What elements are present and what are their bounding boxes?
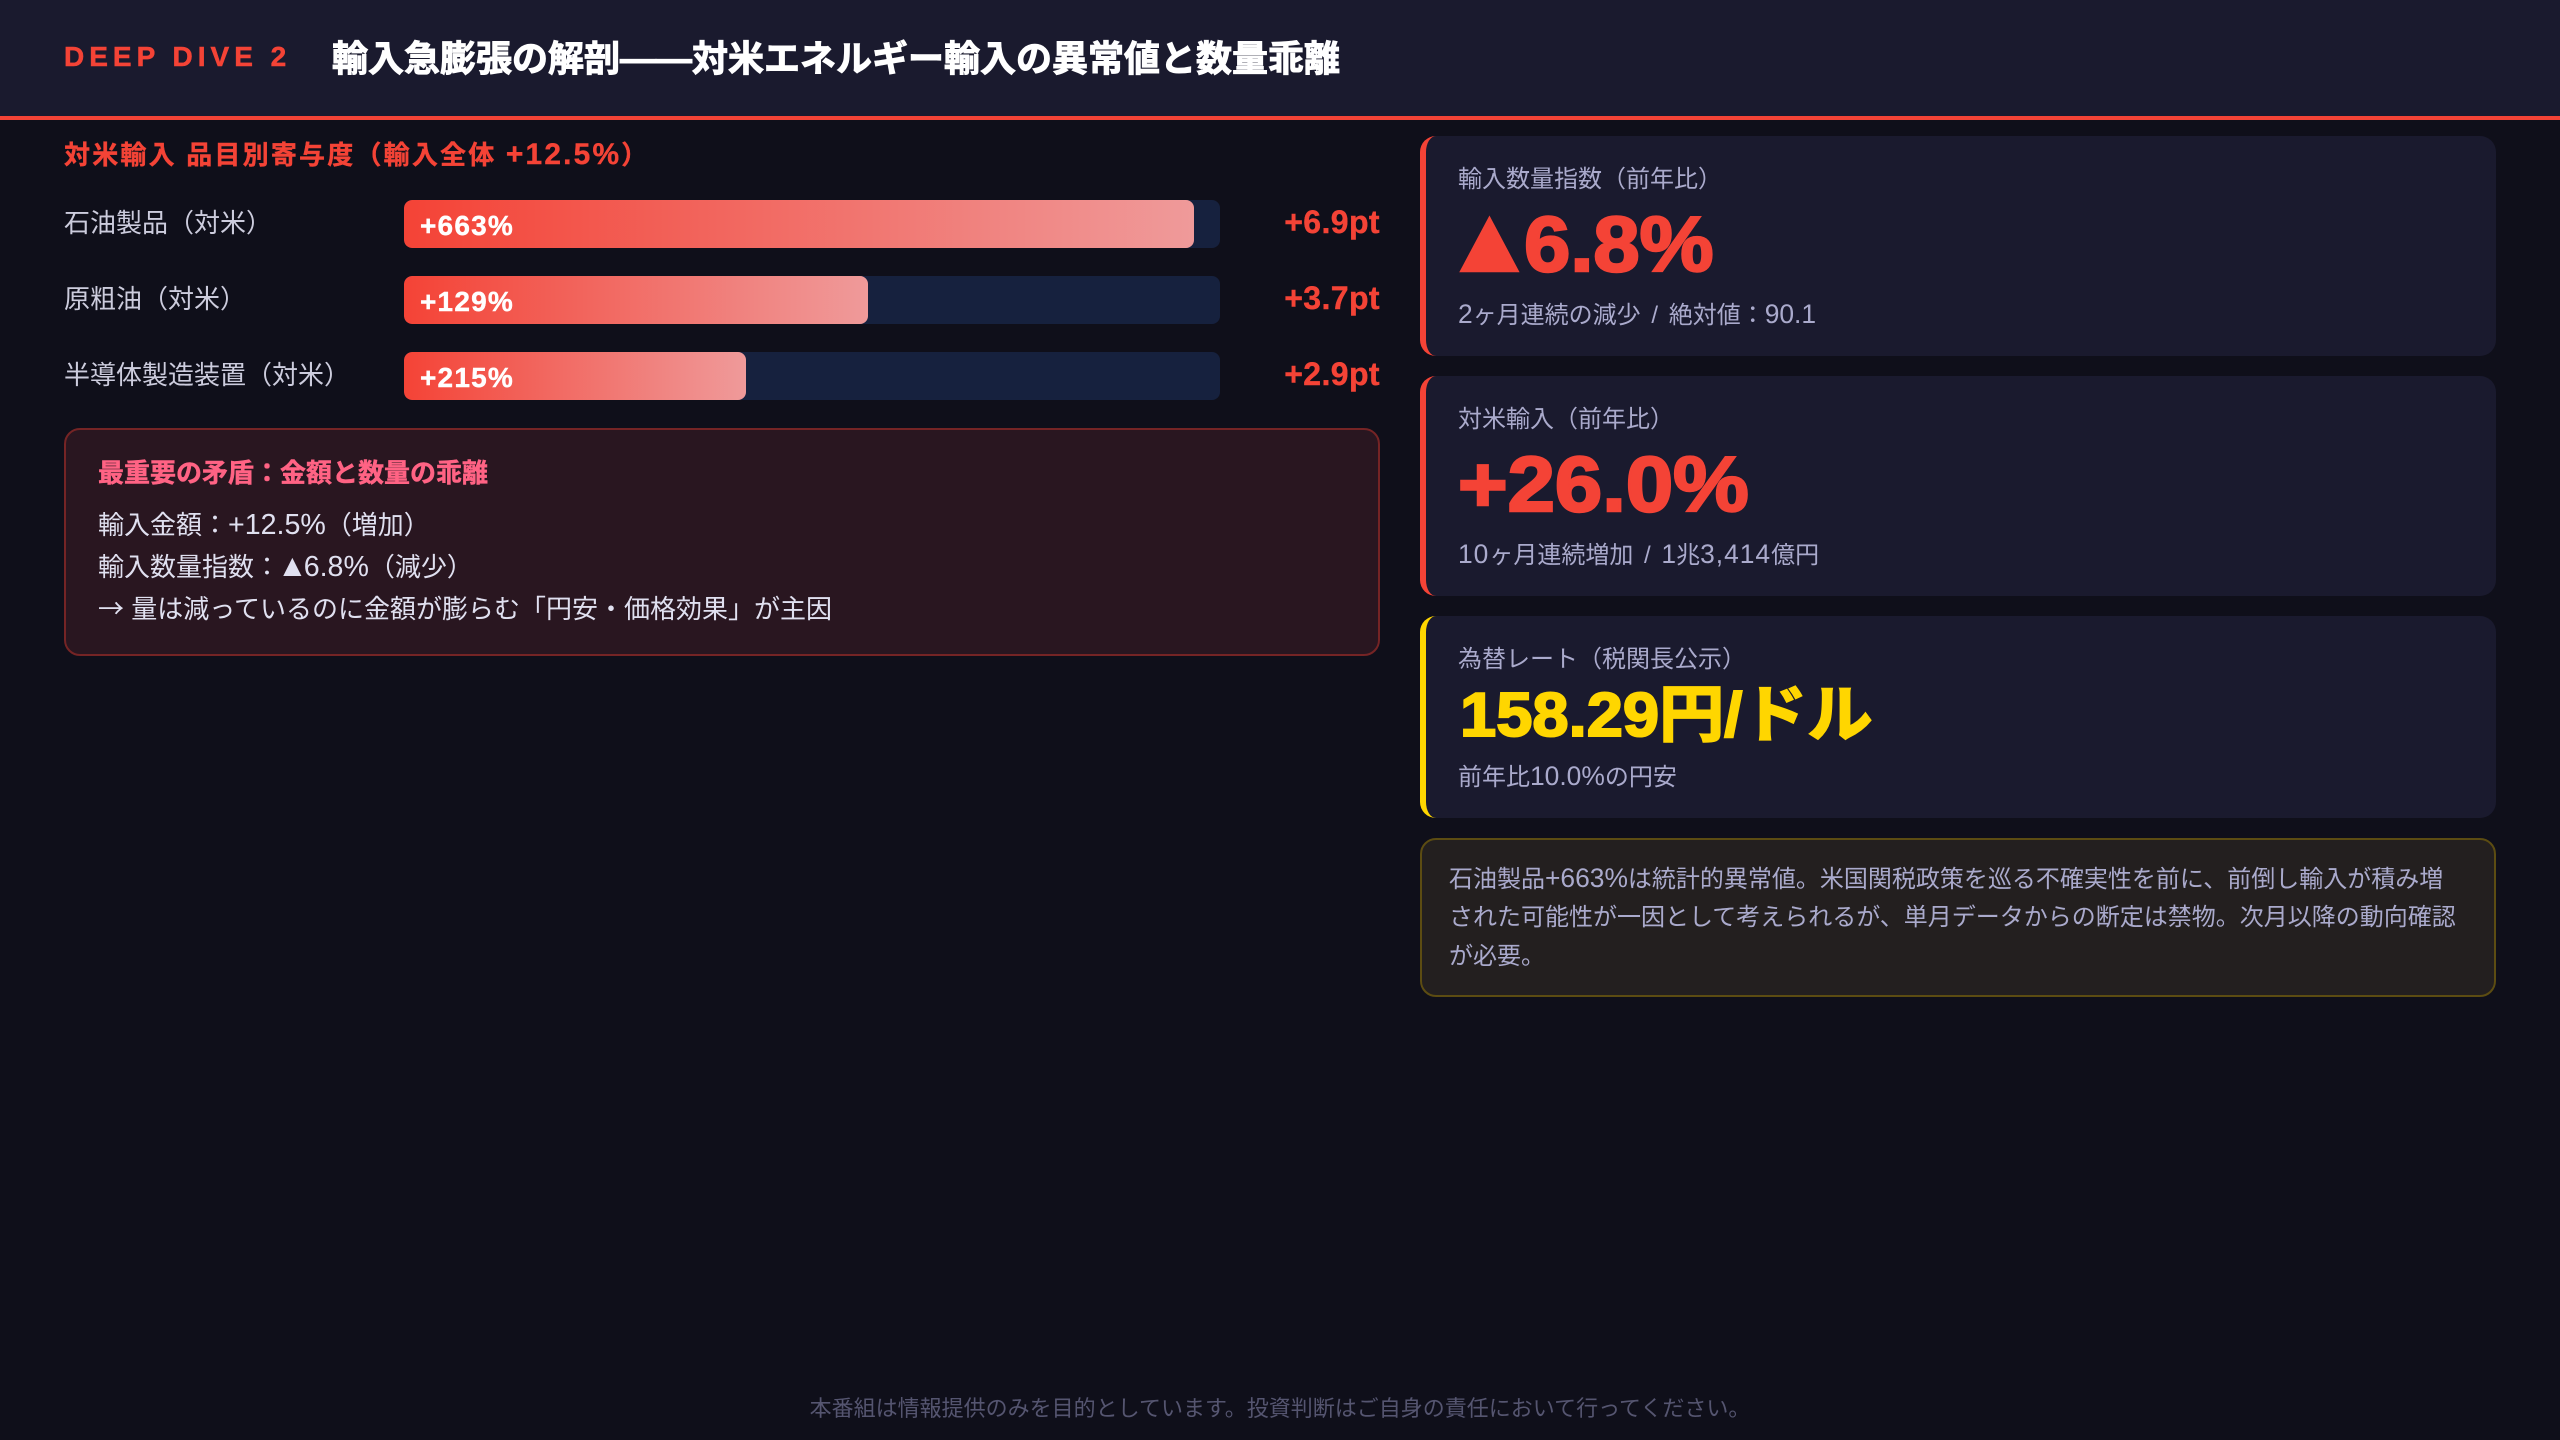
bar chart: contribution by item <box>64 200 1380 400</box>
card value: ▲6.8% <box>1442 191 1713 291</box>
bar row: 石油製品 <box>64 200 1380 248</box>
card value: 158.29円/ドル <box>1460 681 1873 750</box>
callout: contradiction between value and volume <box>64 428 1380 656</box>
card label: 為替レート（税関長公示） <box>1458 646 1746 673</box>
card note: 2ヶ月連続の減少 / 絶対値：90.1 <box>1458 299 1816 329</box>
bar: +663% <box>404 200 1220 248</box>
bar row: 半導体製造装置 <box>64 352 1380 400</box>
note text: が必要。 <box>1449 943 1545 970</box>
callout body: 輸入金額：+12.5%（増加） <box>98 509 430 541</box>
footer disclaimer: 本番組は情報提供のみを目的としています。投資判断はご自身の責任において行ってください。 <box>810 1396 1750 1421</box>
note text <box>1449 863 2456 970</box>
bar value: +2.9pt <box>1284 356 1380 392</box>
card label: 対米輸入（前年比） <box>1458 406 1674 433</box>
bar: +129%: +129% <box>420 286 514 317</box>
callout body: 輸入数量指数：▲6.8%（減少） <box>98 548 473 583</box>
bar value: +3.7pt <box>1284 280 1380 316</box>
bar label: 原粗油（対米） <box>64 284 246 314</box>
KPI card: exchange rate <box>1420 616 2496 818</box>
callout body <box>98 509 832 626</box>
header tag: DEEP DIVE 2 <box>64 41 291 72</box>
note text: 石油製品+663%は統計的異常値。米国関税政策を巡る不確実性を前に、前倒し輸入が積み増 <box>1449 863 2443 893</box>
callout heading: 最重要の矛盾：金額と数量の乖離 <box>98 458 488 488</box>
bar: +129% <box>404 276 1220 324</box>
callout body: → 量は減っているのに金額が膨らむ「円安・価格効果」が主因 <box>98 589 832 626</box>
bar row: 原粗油 <box>64 276 1380 324</box>
title: 輸入急膨張の解剖——対米エネルギー輸入の異常値と数量乖離 <box>332 38 1340 79</box>
note text: された可能性が一因として考えられるが、単月データからの断定は禁物。次月以降の動向確認 <box>1449 904 2456 931</box>
KPI card: import volume index <box>1420 136 2496 356</box>
KPI card: imports from US <box>1420 376 2496 596</box>
card label: 輸入数量指数（前年比） <box>1458 166 1722 193</box>
bar label: 半導体製造装置（対米） <box>64 360 350 390</box>
bar value: +6.9pt <box>1284 204 1380 240</box>
card note: 前年比10.0%の円安 <box>1458 761 1677 791</box>
bar label: 石油製品（対米） <box>64 208 272 238</box>
header bar <box>0 0 2560 120</box>
bar: +215%: +215% <box>420 362 514 393</box>
bar: +663%: +663% <box>420 210 514 241</box>
section heading: contribution by item: 対米輸入 品目別寄与度（輸入全体 +12.5%） <box>64 138 649 171</box>
note: statistical outlier caution <box>1420 838 2496 997</box>
card note: 10ヶ月連続増加 / 1兆3,414億円 <box>1458 539 1819 569</box>
bar: +215% <box>404 352 1220 400</box>
card value: +26.0% <box>1458 440 1749 528</box>
